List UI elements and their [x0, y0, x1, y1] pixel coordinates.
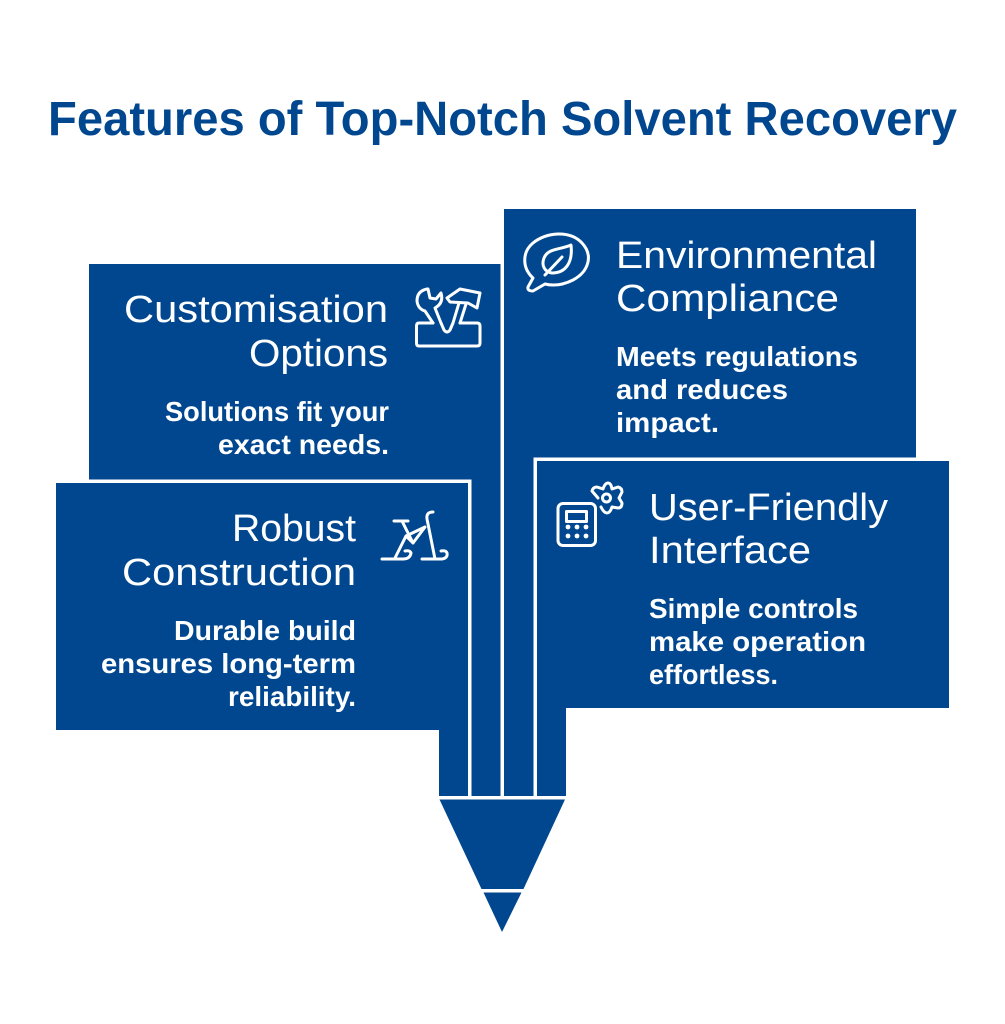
- pencil tip: [440, 800, 565, 932]
- heading: Environmental: [616, 235, 877, 277]
- description: Meets regulations: [616, 341, 858, 372]
- panel shape: [56, 483, 468, 796]
- description: Solutions fit your: [165, 396, 389, 427]
- panel shape: [504, 209, 916, 796]
- heading: [649, 487, 888, 572]
- heading: Robust: [232, 508, 356, 550]
- heading: [616, 235, 877, 320]
- panel shape: [537, 461, 949, 796]
- heading: User-Friendly: [649, 487, 888, 529]
- tip body: [440, 800, 565, 889]
- description: and reduces: [616, 374, 788, 405]
- description: Simple controls: [649, 593, 858, 624]
- description: Durable build: [174, 615, 356, 646]
- heading: [122, 508, 356, 594]
- icon: leaf in speech bubble: [525, 234, 588, 291]
- heading: Customisation: [124, 289, 388, 331]
- icon: calculator with gear: [558, 483, 622, 546]
- description: [101, 615, 356, 712]
- description: [616, 341, 858, 438]
- tip point: [484, 892, 522, 932]
- description: ensures long-term: [101, 648, 356, 679]
- icon: exercise bike: [382, 512, 447, 559]
- panel: customisation options: [89, 264, 500, 796]
- panel: user-friendly interface: [537, 461, 949, 796]
- title: Features of Top-Notch Solvent Recovery: [48, 93, 957, 146]
- heading: Interface: [649, 530, 811, 572]
- description: impact.: [616, 407, 719, 438]
- heading: Options: [249, 333, 388, 375]
- description: [165, 396, 389, 460]
- panel: robust construction: [56, 483, 468, 796]
- description: effortless.: [649, 659, 778, 690]
- description: make operation: [649, 626, 866, 657]
- icon: toolbox with wrench and hammer: [416, 289, 480, 346]
- panel shape: [89, 264, 500, 796]
- description: exact needs.: [218, 429, 389, 460]
- panel: environmental compliance: [504, 209, 916, 796]
- heading: Construction: [122, 552, 356, 594]
- description: [649, 593, 866, 690]
- heading: Compliance: [616, 278, 839, 320]
- heading: [124, 289, 388, 375]
- description: reliability.: [228, 681, 356, 712]
